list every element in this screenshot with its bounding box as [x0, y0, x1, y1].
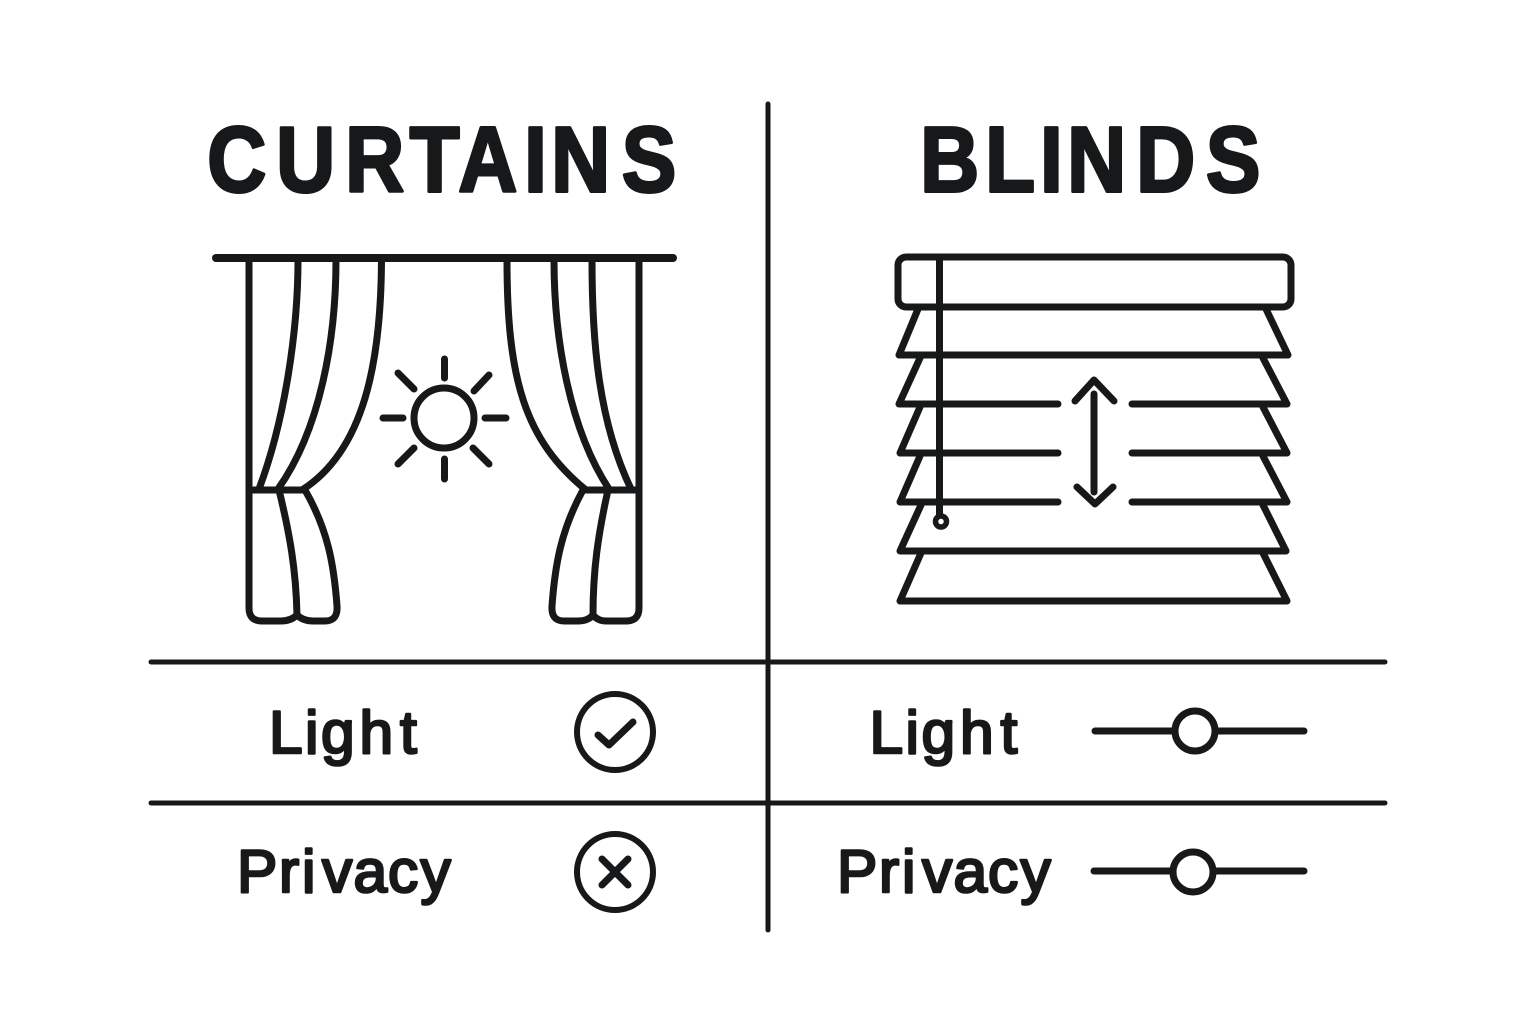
icon: cross [577, 834, 653, 910]
icon: blinds [898, 257, 1291, 601]
title: blinds: BLINDS [920, 108, 1260, 212]
icon: privacy slider [1094, 852, 1304, 892]
icon: check [577, 694, 653, 770]
label: curtains privacy: Privacy [237, 837, 452, 905]
label: blinds light: Light [870, 698, 1018, 766]
title: curtains: CURTAINS [207, 108, 676, 212]
icon: sun [383, 359, 506, 479]
label: curtains light: Light [269, 698, 417, 766]
arrow: up and down [1075, 380, 1114, 504]
left curtain [249, 260, 382, 621]
icon: curtains [216, 258, 673, 621]
label: blinds privacy: Privacy [837, 837, 1052, 905]
right curtain [507, 260, 639, 621]
icon: light slider [1095, 711, 1304, 751]
